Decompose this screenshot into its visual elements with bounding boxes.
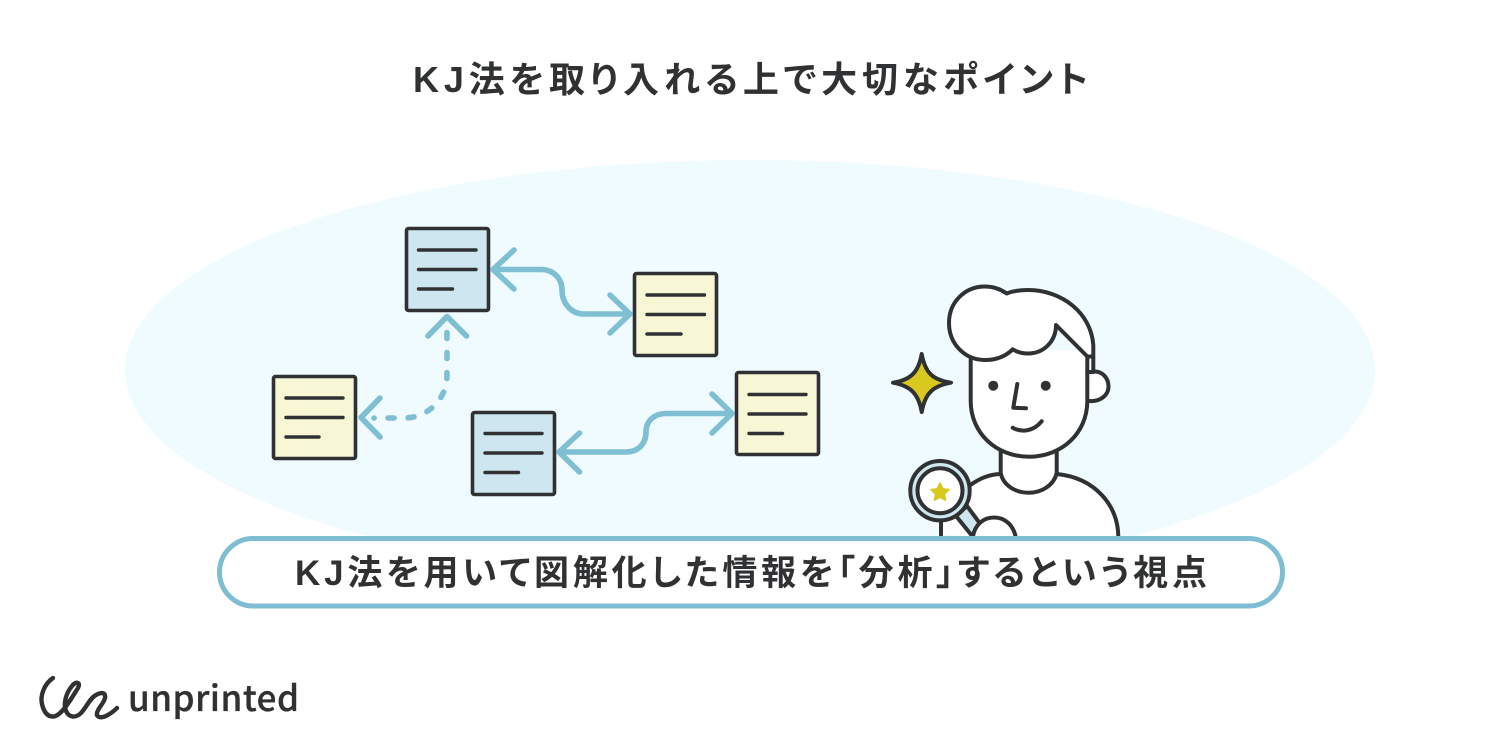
person illustration bbox=[910, 286, 1118, 537]
logo: unprinted bbox=[41, 671, 299, 722]
face fill bbox=[971, 350, 1087, 457]
arrow: top note to upper right note bbox=[493, 250, 630, 333]
eyes bbox=[988, 381, 1051, 391]
caption pill: KJ法を用いて図解化した情報を「分析」するという視点 bbox=[295, 554, 1207, 593]
neck bbox=[1001, 450, 1057, 493]
hair bbox=[949, 286, 1093, 372]
background ellipse bbox=[125, 160, 1375, 580]
body bbox=[941, 474, 1118, 537]
icon: sparkle bbox=[893, 354, 951, 412]
ear bbox=[1087, 371, 1108, 401]
note: yellow right bbox=[736, 372, 818, 454]
note: blue lower bbox=[472, 412, 554, 494]
arrow: lower blue note to right note bbox=[559, 394, 732, 472]
mouth bbox=[1013, 421, 1042, 431]
hand bbox=[973, 518, 1016, 536]
arrow: dashed between left note and top note bbox=[361, 316, 466, 437]
note: blue top bbox=[406, 228, 488, 310]
title: KJ法を取り入れる上で大切なポイント bbox=[413, 59, 1088, 100]
caption pill bbox=[220, 538, 1282, 606]
magnifier lens bbox=[910, 461, 970, 520]
nose bbox=[1013, 384, 1026, 408]
face outline bbox=[971, 350, 1087, 457]
logo mark bbox=[41, 678, 117, 717]
logo wordmark: unprinted bbox=[128, 671, 299, 722]
star bbox=[931, 483, 949, 500]
magnifier handle bbox=[956, 506, 990, 537]
note: yellow left bbox=[274, 376, 356, 458]
note: yellow upper right bbox=[634, 274, 716, 356]
